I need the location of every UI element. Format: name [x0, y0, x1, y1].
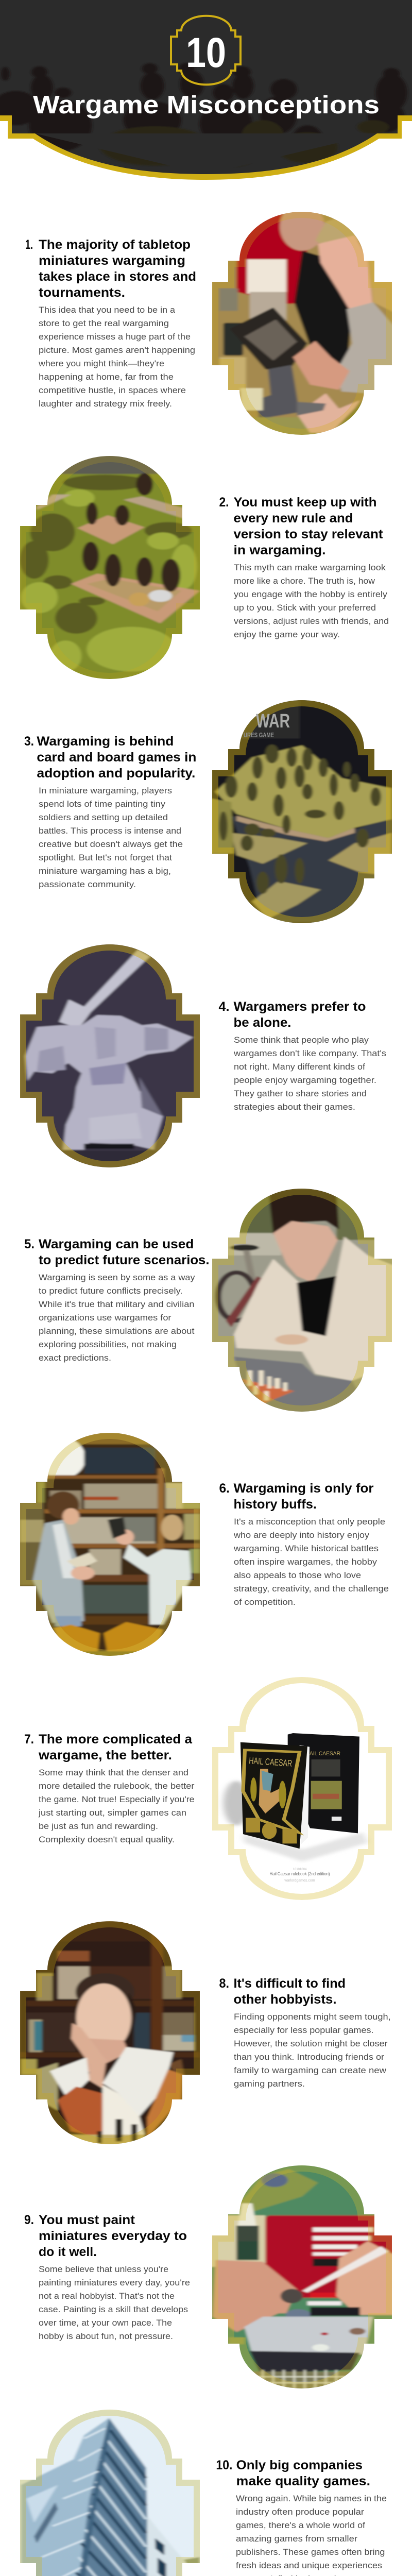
item 4 heading: Wargamers prefer to	[234, 999, 366, 1014]
item 8 text	[219, 1976, 391, 2089]
item 4 body: wargames don't like company. That's	[233, 1048, 386, 1058]
item 9 heading: You must paint	[39, 2213, 135, 2227]
item 6 heading: 6.	[219, 1481, 230, 1496]
rulebook cover title	[249, 1751, 340, 1769]
item 6 heading: history buffs.	[234, 1497, 317, 1512]
item 8 body: Finding opponents might seem tough,	[234, 2012, 391, 2022]
header banner	[0, 0, 412, 180]
item 10 heading: make quality games.	[236, 2474, 370, 2488]
item 7 heading: wargame, the better.	[38, 1748, 172, 1762]
photo 2: miniatures on grass	[19, 455, 202, 682]
item 7 heading	[24, 1732, 193, 1762]
item 1 heading: takes place in stores and	[39, 269, 196, 284]
item 3 body: spend lots of time painting tiny	[39, 799, 166, 809]
item 6 body: It's a misconception that only people	[234, 1517, 385, 1527]
item 2 body: This myth can make wargaming look	[234, 563, 386, 572]
item 1 text	[25, 238, 196, 409]
item 10 body: Wrong again. While big names in the	[236, 2494, 387, 2503]
item 2 body: up to you. Stick with your preferred	[234, 603, 376, 613]
item 3 body: battles. This process is intense and	[39, 826, 181, 836]
item 6 body	[233, 1517, 389, 1607]
photo 5: man at chess board	[210, 1189, 394, 1415]
header silhouette of miniatures	[0, 63, 407, 166]
photo 8: woman at chess board before bookshelf	[19, 1921, 202, 2147]
item 10 heading: Only big companies	[236, 2458, 363, 2472]
item 6 body: who are deeply into history enjoy	[233, 1530, 370, 1540]
item 1 body: where you might think—they're	[38, 359, 164, 368]
item 2 body: versions, adjust rules with friends, and	[234, 616, 389, 626]
item 7 body: Some may think that the denser and	[39, 1768, 188, 1777]
item 8 body	[234, 2012, 391, 2089]
item 5 heading: Wargaming can be used	[39, 1237, 194, 1251]
item 4 body: Some think that people who play	[234, 1035, 369, 1045]
item 10 body: amazing games from smaller	[236, 2534, 357, 2544]
item 10 heading	[216, 2458, 370, 2488]
item 2 heading	[219, 495, 383, 557]
item 7 heading: The more complicated a	[39, 1732, 193, 1747]
item 6 body: wargaming. While historical battles	[233, 1544, 379, 1553]
item 1 heading: tournaments.	[39, 285, 125, 300]
item 1 body	[38, 305, 195, 409]
item 10 body: fresh ideas and unique experiences	[236, 2561, 382, 2570]
item 6 body: of competition.	[234, 1597, 296, 1607]
rulebook caption: Hail Caesar rulebook (2nd edition)	[270, 1871, 330, 1876]
item 5 text	[24, 1237, 209, 1363]
photo 1: painting a miniature	[210, 202, 394, 436]
item 3 body	[39, 786, 183, 889]
item 8 body: especially for less popular games.	[234, 2025, 374, 2035]
item 7 body: Complexity doesn't equal quality.	[39, 1835, 175, 1844]
item 3 body: creative but doesn't always get the	[39, 839, 183, 849]
item 2 heading: version to stay relevant	[234, 527, 383, 541]
item 4 heading: be alone.	[234, 1015, 291, 1030]
item 10 heading: 10.	[216, 2458, 232, 2472]
item 5 body: Wargaming is seen by some as a way	[39, 1273, 195, 1282]
item 8 heading: other hobbyists.	[234, 1992, 337, 2007]
item 2 heading: every new rule and	[234, 511, 353, 526]
item 3 heading: adoption and popularity.	[37, 766, 195, 781]
photo 3 box title: URES GAME	[244, 731, 274, 739]
item 5 heading	[24, 1237, 209, 1267]
item 2 heading: 2.	[219, 495, 229, 510]
item 5 body: planning, these simulations are about	[39, 1326, 195, 1336]
item 1 heading: 1.	[25, 238, 33, 252]
photo 10: glass office building	[19, 2410, 202, 2576]
item 5 body: organizations use wargames for	[39, 1313, 171, 1323]
item 1 heading: The majority of tabletop	[39, 238, 191, 252]
item 4 heading: 4.	[218, 999, 230, 1014]
rulebook cover title: HAIL CAESAR	[249, 1755, 293, 1769]
photo 3 box title: WAR	[256, 710, 290, 732]
item 6 body: strategy, creativity, and the challenge	[234, 1584, 389, 1594]
badge frame	[171, 16, 241, 84]
header gold border	[0, 115, 412, 180]
photo 9: hands painting a miniature	[210, 2165, 394, 2392]
item 9 heading: 9.	[24, 2213, 34, 2227]
item 6 heading: Wargaming is only for	[234, 1481, 374, 1496]
item 5 body: to predict future conflicts precisely.	[39, 1286, 182, 1296]
item 8 heading: 8.	[219, 1976, 229, 1991]
item 8 body: However, the solution might be closer	[234, 2039, 388, 2048]
photo 3: army of miniatures on terrain	[210, 699, 394, 926]
main title: Wargame Misconceptions	[33, 91, 380, 119]
item 5 body: While it's true that military and civilian	[39, 1299, 195, 1309]
item 7 body: just starting out, simpler games can	[38, 1808, 186, 1818]
item 2 heading: You must keep up with	[234, 495, 377, 510]
photo 6: two people at a bookshelf	[19, 1432, 202, 1660]
item 9 body	[39, 2264, 190, 2341]
item 9 body: over time, at your own pace. The	[39, 2318, 172, 2328]
item 8 body: gaming partners.	[234, 2079, 305, 2089]
item 3 text	[24, 734, 196, 889]
item 7 body	[38, 1768, 195, 1844]
photo 3 box title	[244, 710, 290, 739]
item 9 heading: do it well.	[39, 2245, 97, 2259]
item 9 body: painting miniatures every day, you're	[39, 2278, 190, 2287]
item 2 body	[234, 563, 389, 639]
item 10 body: publishers. These games often bring	[236, 2547, 385, 2557]
item 3 heading: 3.	[24, 734, 34, 749]
item 1 heading: miniatures wargaming	[39, 253, 185, 268]
item 7 body: the game. Not true! Especially if you're	[39, 1794, 195, 1804]
item 5 heading: 5.	[24, 1237, 35, 1251]
item 9 heading: miniatures everyday to	[39, 2229, 187, 2243]
item 3 heading: Wargaming is behind	[37, 734, 174, 749]
rulebook caption: warlordgames.com	[284, 1879, 315, 1883]
item 3 body: miniature wargaming has a big,	[39, 866, 171, 876]
item 2 body: you engage with the hobby is entirely	[234, 589, 388, 599]
item 1 body: store to get the real wargaming	[39, 318, 169, 328]
item 5 body	[39, 1273, 195, 1363]
item 9 body: hobby is about fun, not pressure.	[39, 2331, 173, 2341]
item 8 body: family to wargaming can create new	[234, 2065, 387, 2075]
rulebook cover title: AIL CAESAR	[310, 1751, 340, 1757]
badge number: 10	[186, 29, 226, 76]
item 10 body: industry often produce popular	[236, 2507, 364, 2517]
item 1 body: laughter and strategy mix freely.	[39, 399, 172, 409]
item 3 body: spotlight. But let's not forget that	[39, 853, 172, 862]
item 3 body: passionate community.	[39, 879, 136, 889]
photo 4: grey fantasy miniature	[19, 943, 202, 1170]
header dark panel	[0, 0, 412, 177]
item 7 body: be just as fun and rewarding.	[39, 1821, 158, 1831]
item 5 heading: to predict future scenarios.	[39, 1253, 209, 1267]
item 8 body: than you think. Introducing friends or	[234, 2052, 384, 2062]
item 7 body: more detailed the rulebook, the better	[39, 1781, 195, 1791]
item 1 heading	[25, 238, 196, 300]
item 4 body: people enjoy wargaming together.	[234, 1075, 376, 1085]
item 4 body: not right. Many different kinds of	[234, 1062, 365, 1072]
item 1 body: experience misses a huge part of the	[39, 332, 191, 342]
item 7 heading: 7.	[24, 1732, 34, 1747]
item 10 text	[216, 2458, 387, 2576]
item 6 body: often inspire wargames, the hobby	[234, 1557, 377, 1567]
item 3 body: soldiers and setting up detailed	[39, 812, 168, 822]
item 4 heading	[218, 999, 366, 1030]
item 7 text	[24, 1732, 195, 1844]
item 4 body: strategies about their games.	[234, 1102, 355, 1112]
item 6 heading	[219, 1481, 374, 1512]
item 6 body: also appeals to those who love	[234, 1570, 361, 1580]
item 4 body	[233, 1035, 386, 1112]
item 5 body: exploring possibilities, not making	[39, 1340, 177, 1349]
item 9 body: Some believe that unless you're	[39, 2264, 168, 2274]
item 4 text	[218, 999, 386, 1112]
item 1 body: picture. Most games aren't happening	[39, 345, 195, 355]
item 1 body: happening at home, far from the	[39, 372, 174, 382]
item 2 body: enjoy the game your way.	[234, 630, 340, 639]
item 10 body: games, there's a whole world of	[236, 2520, 365, 2530]
item 9 body: not a real hobbyist. That's not the	[39, 2291, 175, 2301]
item 1 body: This idea that you need to be in a	[39, 305, 176, 315]
rulebook caption: 10101004	[293, 1868, 307, 1871]
rulebook caption	[270, 1868, 330, 1883]
item 3 heading	[24, 734, 196, 781]
item 4 body: They gather to share stories and	[234, 1089, 367, 1098]
item 6 text	[219, 1481, 389, 1607]
item 10 body	[236, 2494, 387, 2576]
item 9 heading	[24, 2213, 187, 2259]
item 2 body: more like a chore. The truth is, how	[234, 576, 375, 586]
item 3 body: In miniature wargaming, players	[39, 786, 172, 795]
item 9 body: case. Painting is a skill that develops	[39, 2304, 188, 2314]
item 1 body: competitive hustle, in spaces where	[39, 385, 186, 395]
item 8 heading: It's difficult to find	[234, 1976, 346, 1991]
item 8 heading	[219, 1976, 346, 2007]
item 5 body: exact predictions.	[39, 1353, 111, 1363]
item 9 text	[24, 2213, 190, 2341]
photo 7: Hail Caesar rulebook	[212, 1677, 392, 1900]
item 3 heading: card and board games in	[37, 750, 196, 765]
item 2 text	[219, 495, 389, 639]
item 2 heading: in wargaming.	[234, 543, 325, 557]
